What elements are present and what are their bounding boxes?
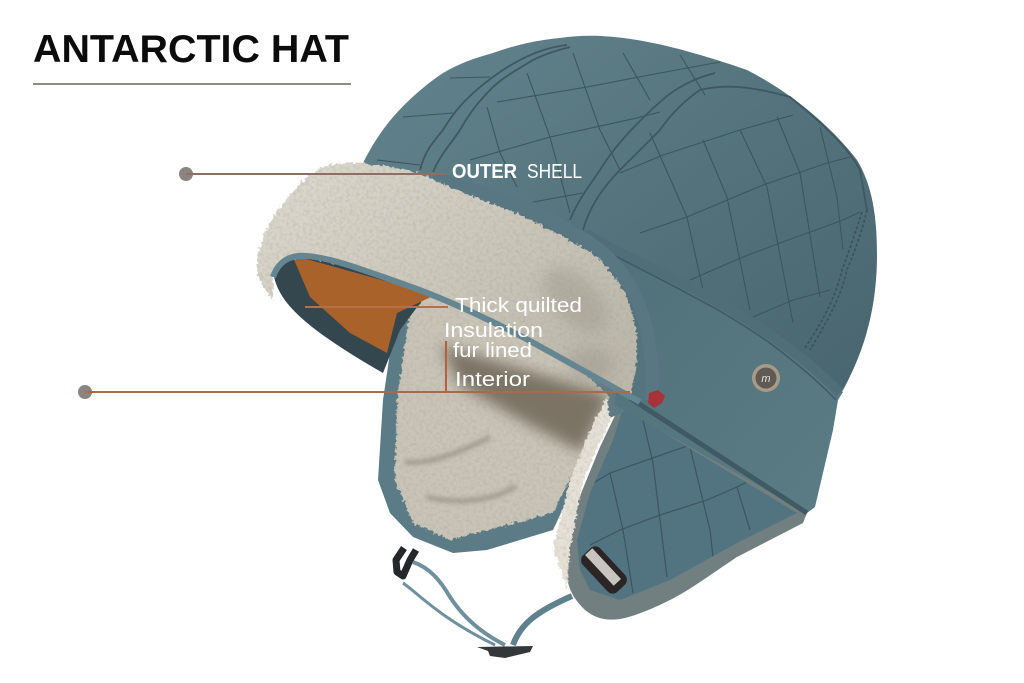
buckle	[578, 544, 630, 596]
callout: interior	[78, 306, 630, 399]
metal button	[752, 364, 780, 392]
orange inner lining	[292, 255, 435, 353]
callout text: insulation and lining: Thick quilted	[455, 295, 582, 317]
dark rim under brim	[273, 250, 430, 373]
fur brim piping	[432, 178, 653, 400]
fleece edge of flap	[553, 397, 610, 590]
hat illustration	[257, 36, 877, 658]
ear flap outer	[567, 405, 807, 620]
red stitched logo	[648, 390, 665, 408]
inner fleece lining	[395, 295, 610, 540]
metal button: m	[761, 373, 771, 385]
callout: outer shell: SHELL	[527, 161, 582, 183]
title: ANTARCTIC HAT	[33, 28, 349, 71]
brim shading	[531, 256, 619, 383]
lining shadow under brim	[440, 345, 610, 452]
panel seams	[420, 45, 867, 230]
callout: outer shell	[179, 161, 582, 183]
callout text: insulation and lining: Interior	[455, 369, 530, 391]
callout: outer shell: OUTER	[452, 161, 518, 183]
side band	[575, 225, 843, 513]
inner flap teal edge	[378, 285, 640, 553]
callout text: insulation and lining	[444, 295, 582, 391]
crown	[363, 36, 877, 390]
fur brim	[257, 162, 637, 395]
callout text: insulation and lining: fur lined	[453, 340, 532, 362]
callout text: insulation and lining: Insulation	[444, 320, 543, 342]
brim piping	[273, 256, 640, 402]
quilting	[377, 53, 860, 323]
chin strap	[396, 548, 572, 658]
